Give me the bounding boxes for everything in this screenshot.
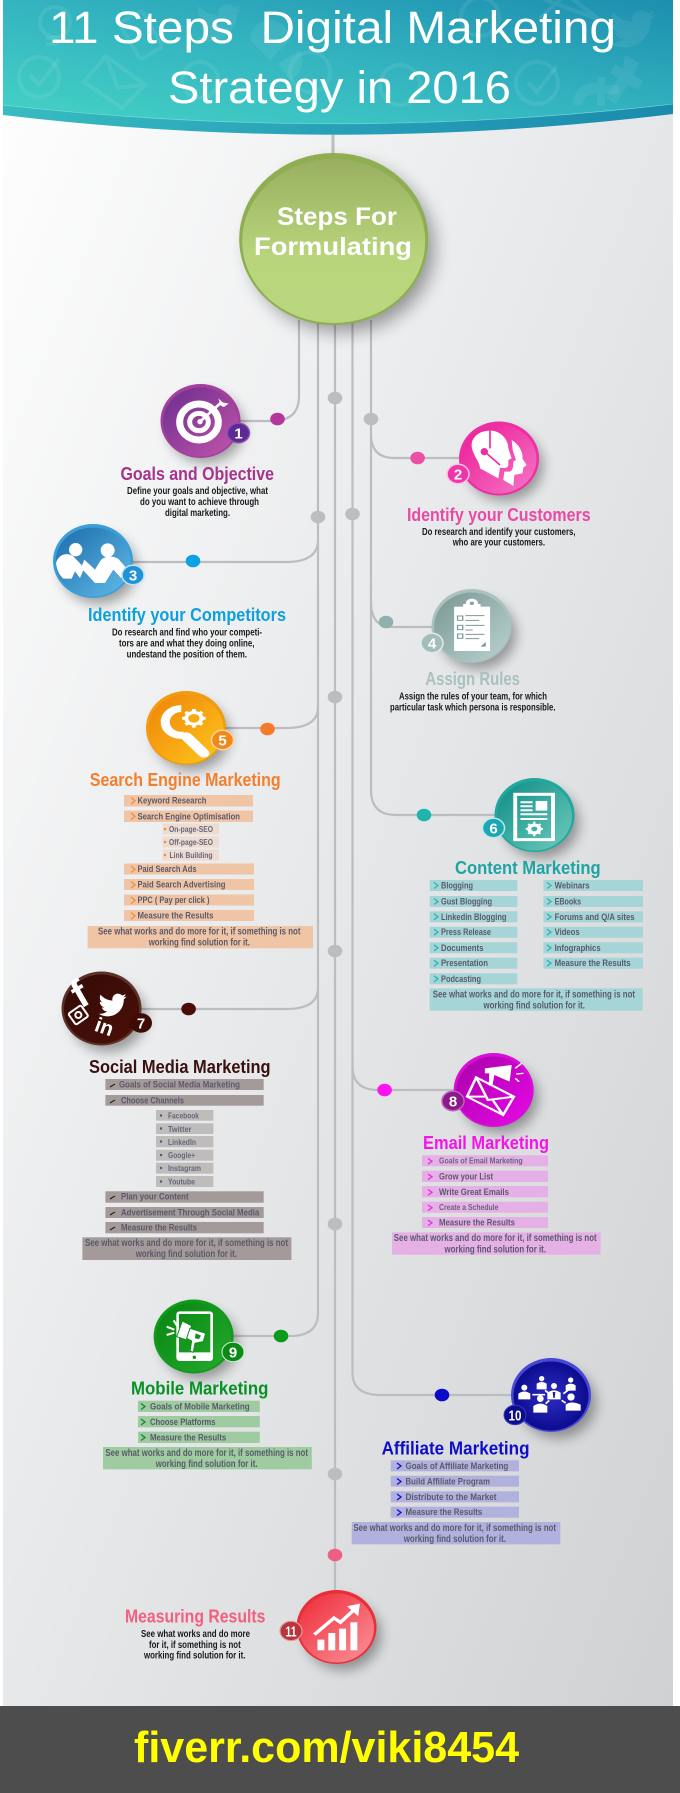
see what works note xyxy=(82,1237,291,1260)
item list: Facebook xyxy=(168,1110,199,1120)
centre circle: steps for formulating: Steps For xyxy=(277,203,397,231)
icon: target xyxy=(160,384,250,463)
badge 6: 6 xyxy=(489,820,498,838)
item list: Measure the Results xyxy=(121,1222,197,1232)
item list: Advertisement Through Social Media xyxy=(121,1208,260,1218)
icon: social networks: f xyxy=(63,972,97,1017)
description: Do research and find who your competi- xyxy=(112,628,262,638)
icon: heads xyxy=(447,422,543,501)
centre circle: steps for formulating xyxy=(239,153,434,332)
icon: social networks: in xyxy=(92,1013,117,1041)
item list: Goals of Email Marketing xyxy=(439,1156,523,1166)
item list: Goals of Mobile Marketing xyxy=(150,1402,250,1412)
see what works note: working find solution for it. xyxy=(403,1534,506,1545)
item columns: Press Release xyxy=(441,927,491,937)
heading: Assign Rules xyxy=(425,669,520,689)
badge 4: 4 xyxy=(428,636,437,652)
item list: Search Engine Optimisation xyxy=(138,811,240,821)
item list: Keyword Research xyxy=(138,796,206,806)
heading: Mobile Marketing xyxy=(131,1379,268,1399)
badge 10: 10 xyxy=(508,1408,522,1424)
item columns: Forums and Q/A sites xyxy=(555,912,635,922)
step 7: social media marketing xyxy=(62,972,291,1260)
description xyxy=(112,628,262,661)
icon: social networks xyxy=(62,972,152,1052)
item list: Measure the Results xyxy=(439,1218,515,1228)
item list: Choose Channels xyxy=(121,1096,184,1106)
coloured step dots xyxy=(181,413,449,1401)
description xyxy=(390,692,556,714)
item list: Measure the Results xyxy=(406,1507,482,1517)
description: See what works and do more xyxy=(141,1629,250,1640)
badge 3: 3 xyxy=(129,568,137,584)
icon: clipboard xyxy=(421,589,516,669)
footer bar xyxy=(0,1706,680,1793)
item list: LinkedIn xyxy=(168,1137,196,1147)
see what works note xyxy=(430,988,643,1012)
step 11: measuring results xyxy=(125,1590,381,1670)
badge 11: 11 xyxy=(286,1624,296,1640)
item columns: Blogging xyxy=(441,880,473,890)
centre circle: steps for formulating: Formulating xyxy=(254,233,412,261)
see what works note: working find solution for it. xyxy=(148,938,250,948)
item columns: Documents xyxy=(441,943,484,953)
item list xyxy=(105,1079,264,1233)
step 5: search engine marketing xyxy=(88,691,313,948)
see what works note: working find solution for it. xyxy=(155,1459,258,1470)
see what works note xyxy=(103,1447,312,1470)
title: 11 Steps Digital Marketing xyxy=(49,2,616,53)
description: for it, if something is not xyxy=(149,1640,241,1651)
icon: network of people xyxy=(504,1358,596,1438)
item list: Youtube xyxy=(168,1176,195,1186)
item list: Build Affiliate Program xyxy=(406,1476,490,1486)
title: Strategy in 2016 xyxy=(168,62,511,113)
see what works note: See what works and do more for it, if something is not xyxy=(98,926,301,938)
item list: Instagram xyxy=(168,1163,201,1173)
item list: Goals of Social Media Marketing xyxy=(119,1080,240,1090)
item columns: Podcasting xyxy=(441,974,481,984)
badge 9: 9 xyxy=(229,1344,237,1362)
item columns: Gust Blogging xyxy=(441,896,492,906)
item list xyxy=(124,795,254,921)
badge 8: 8 xyxy=(449,1094,457,1110)
item list: Choose Platforms xyxy=(150,1417,216,1427)
description: working find solution for it. xyxy=(143,1651,246,1662)
description: digital marketing. xyxy=(165,508,230,519)
item list: Measure the Results xyxy=(138,910,214,920)
item list: Goals of Affiliate Marketing xyxy=(406,1461,508,1471)
description: Do research and identify your customers, xyxy=(422,527,576,538)
icon: magnifier and gear xyxy=(146,691,234,771)
item columns: Linkedin Blogging xyxy=(441,912,506,922)
see what works note: See what works and do more for it, if something is not xyxy=(85,1238,289,1249)
see what works note: working find solution for it. xyxy=(444,1244,546,1256)
heading: Search Engine Marketing xyxy=(90,770,281,790)
item columns: Webinars xyxy=(555,880,590,890)
description xyxy=(422,527,576,548)
step 6: content marketing xyxy=(430,778,643,1012)
heading: Identify your Competitors xyxy=(88,605,286,625)
heading: Goals and Objective xyxy=(120,464,274,484)
item list xyxy=(391,1460,519,1518)
footer link text: fiverr.com/viki8454 xyxy=(134,1723,520,1772)
description: undestand the position of them. xyxy=(127,650,247,661)
step 1: goals and objective xyxy=(120,384,274,519)
description xyxy=(127,486,269,519)
see what works note: See what works and do more for it, if something is not xyxy=(394,1233,597,1244)
heading: Measuring Results xyxy=(125,1606,265,1626)
badge 7: 7 xyxy=(137,1016,145,1032)
heading: Content Marketing xyxy=(455,858,601,878)
badge 5: 5 xyxy=(218,732,227,750)
see what works note xyxy=(88,926,313,948)
item list: Grow your List xyxy=(439,1172,493,1182)
item columns: Measure the Results xyxy=(555,958,631,968)
see what works note: working find solution for it. xyxy=(483,1000,585,1012)
heading: Email Marketing xyxy=(423,1133,549,1153)
see what works note xyxy=(392,1232,601,1256)
item list: Distribute to the Market xyxy=(406,1492,496,1502)
item columns xyxy=(430,880,643,984)
description: who are your customers. xyxy=(452,538,545,548)
item columns: Videos xyxy=(555,927,580,937)
step 2: identify your customers xyxy=(407,422,591,548)
item list: Paid Search Ads xyxy=(138,864,196,874)
heading: Identify your Customers xyxy=(407,505,591,525)
junction dots xyxy=(311,392,378,1561)
item list: PPC ( Pay per click ) xyxy=(138,895,210,905)
step 9: mobile marketing xyxy=(103,1300,312,1470)
title xyxy=(49,2,616,113)
heading: Affiliate Marketing xyxy=(382,1439,530,1459)
description xyxy=(141,1629,250,1662)
item list: Create a Schedule xyxy=(439,1202,499,1212)
see what works note: See what works and do more for it, if something is not xyxy=(105,1448,309,1459)
step 4: assign rules xyxy=(390,589,556,714)
item list: Plan your Content xyxy=(121,1192,189,1202)
description: Assign the rules of your team, for which xyxy=(399,692,547,703)
connector lines xyxy=(110,135,530,1595)
item list: Write Great Emails xyxy=(439,1187,509,1197)
icon: tablet and megaphone xyxy=(154,1300,244,1379)
description: do you want to achieve through xyxy=(140,497,259,508)
step 10: affiliate marketing xyxy=(352,1358,596,1545)
item list: Google+ xyxy=(168,1150,195,1160)
badge 2: 2 xyxy=(454,466,462,484)
description: particular task which persona is responsible. xyxy=(390,703,556,714)
item list: Twitter xyxy=(168,1124,192,1134)
see what works note: See what works and do more for it, if something is not xyxy=(353,1523,557,1534)
item list: Link Building xyxy=(170,850,212,860)
description: tors are and what they doing online, xyxy=(119,639,255,650)
badge 1: 1 xyxy=(234,426,243,442)
see what works note xyxy=(352,1522,560,1545)
see what works note: working find solution for it. xyxy=(135,1249,237,1260)
item list xyxy=(138,1401,260,1443)
item columns: Infographics xyxy=(555,943,601,953)
item list: On-page-SEO xyxy=(169,824,213,834)
heading: Social Media Marketing xyxy=(89,1057,271,1077)
step 8: email marketing xyxy=(392,1053,601,1256)
item list xyxy=(422,1155,548,1228)
description: Define your goals and objective, what xyxy=(127,486,269,497)
header faint background icons xyxy=(19,0,600,108)
item list: Off-page-SEO xyxy=(169,837,213,847)
item list: Paid Search Advertising xyxy=(138,880,226,890)
icon: envelope and megaphone xyxy=(442,1053,538,1133)
icon: document xyxy=(482,778,579,858)
item columns: EBooks xyxy=(555,896,581,906)
item columns: Presentation xyxy=(441,958,488,968)
step 3: identify your competitors xyxy=(53,524,286,661)
icon: people xyxy=(53,524,144,604)
header banner xyxy=(3,0,673,135)
item list: Measure the Results xyxy=(150,1432,226,1442)
icon: rising chart xyxy=(280,1590,381,1670)
